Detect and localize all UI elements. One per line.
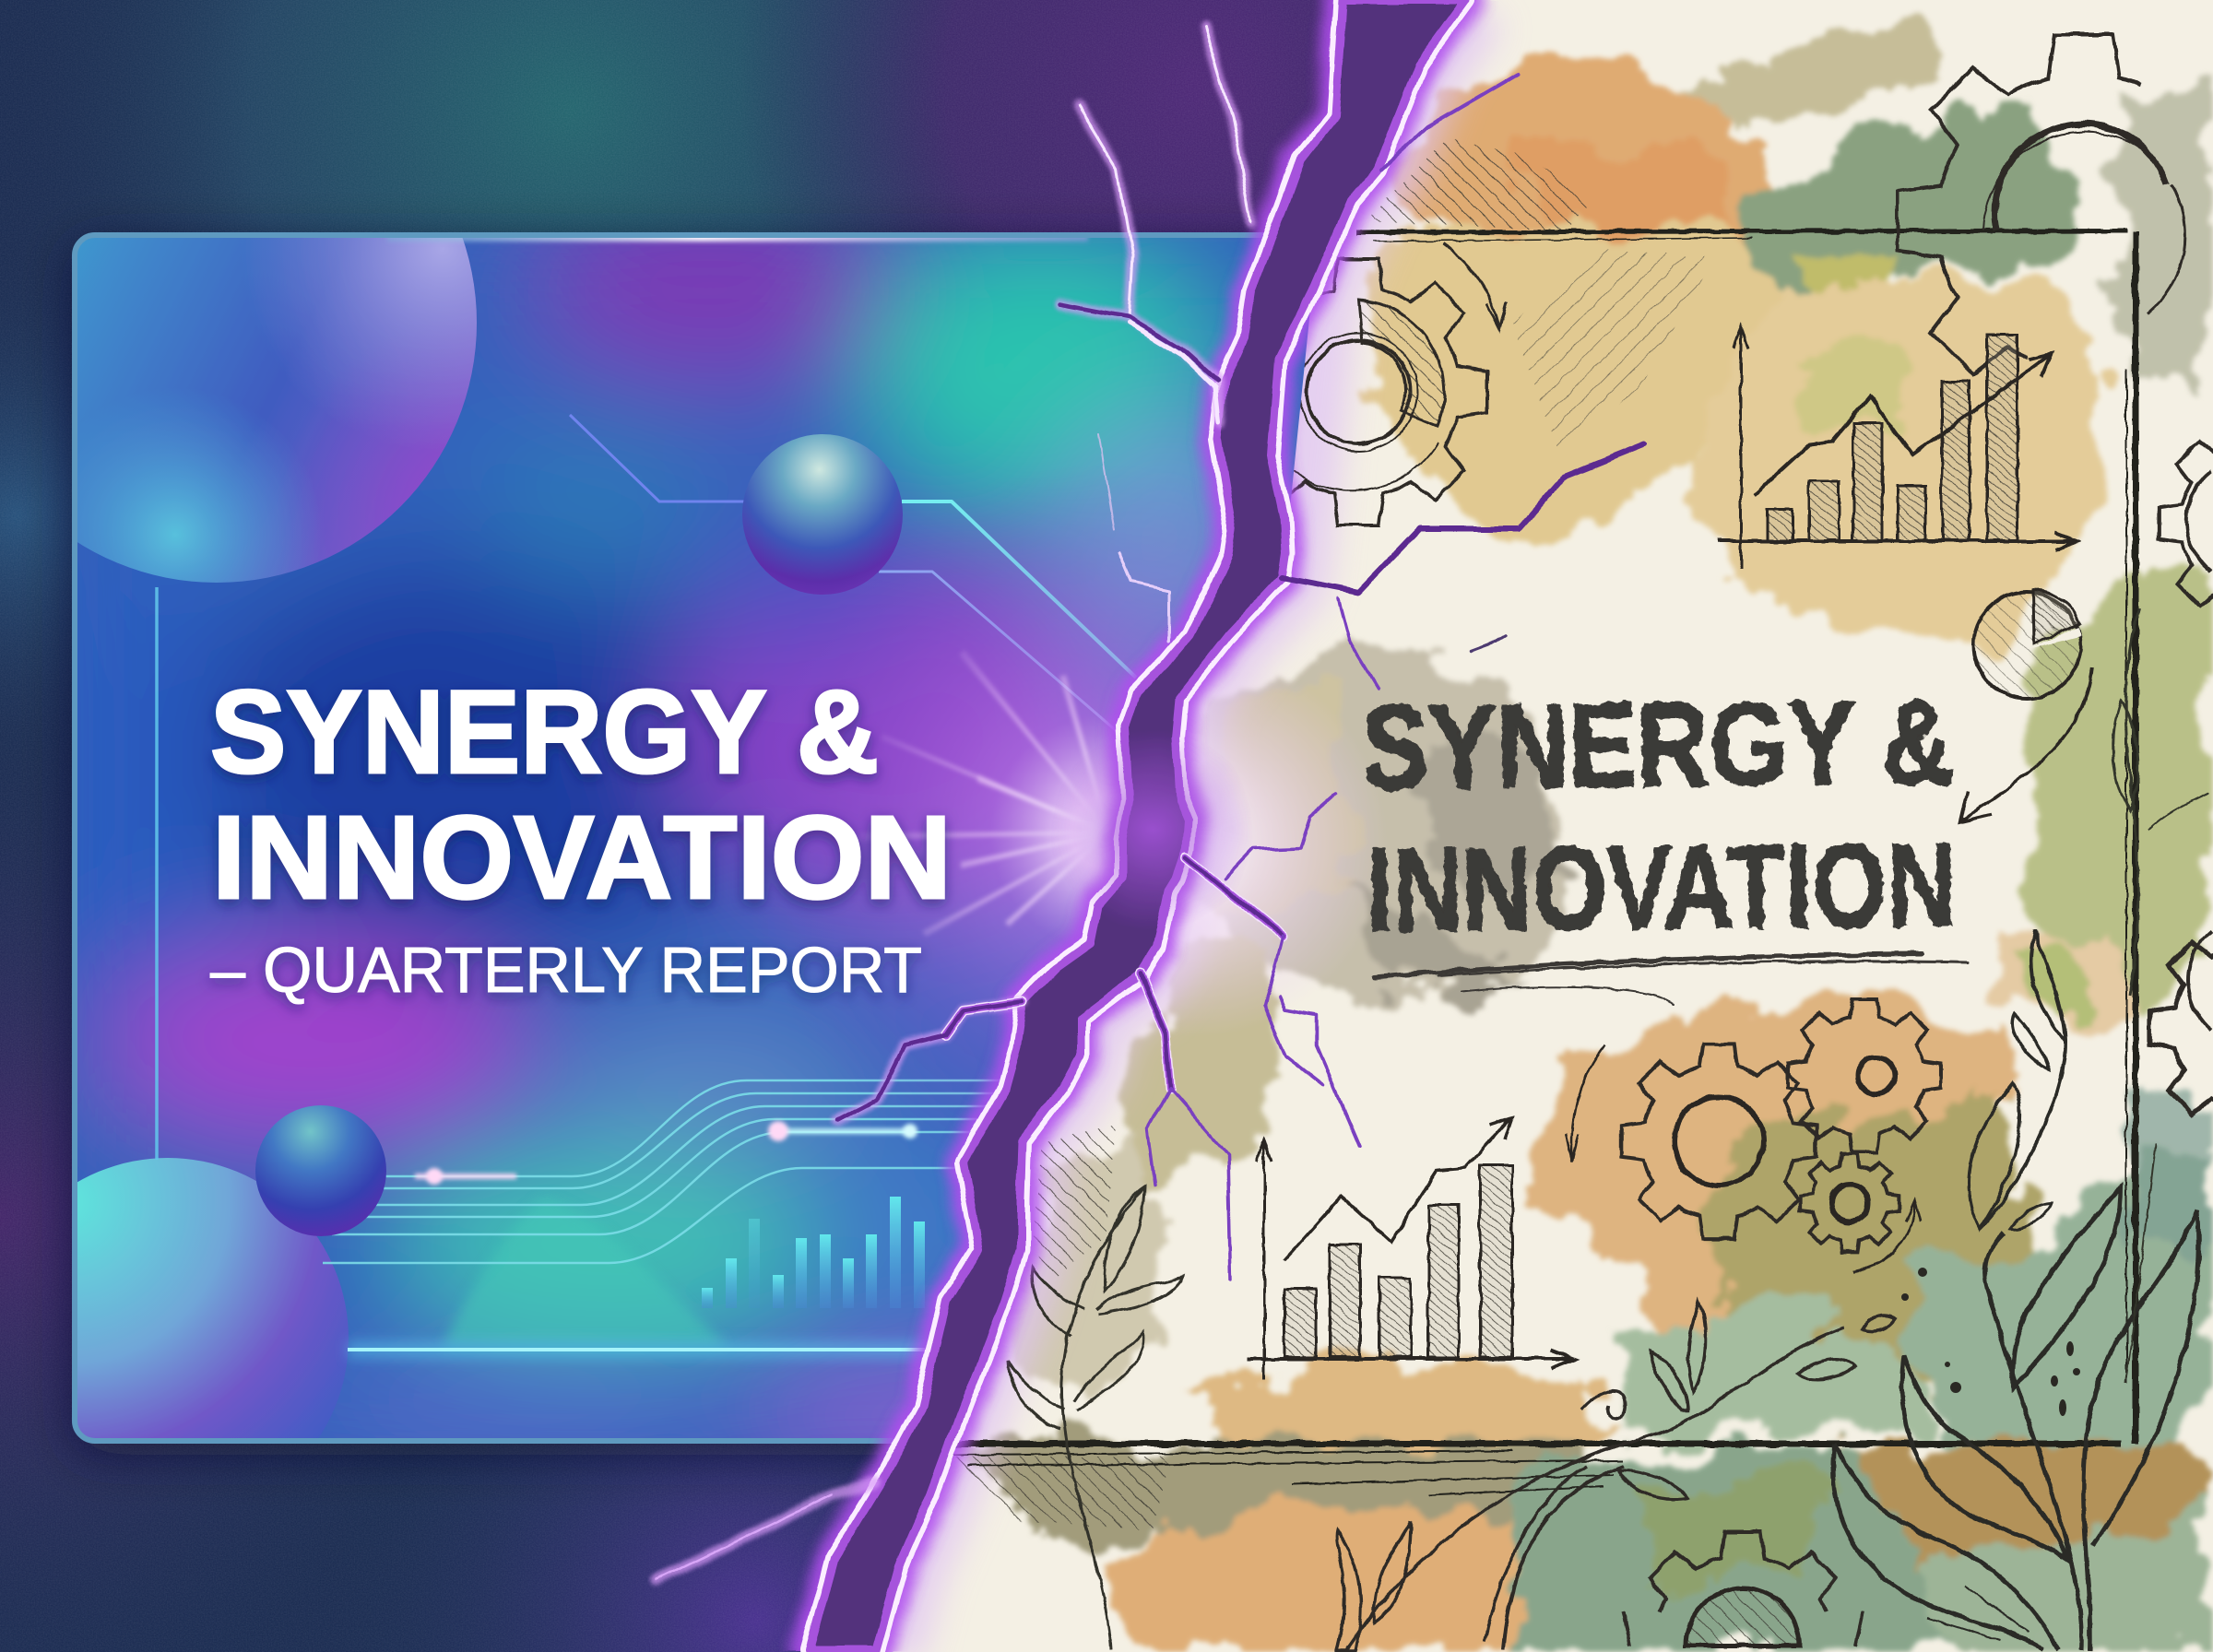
- big sphere: top left: [77, 238, 477, 583]
- plant: bottom center vine: [1336, 1302, 1895, 1650]
- title line: SYNERGY &: SYNERGY &: [210, 667, 879, 798]
- glowing nodes on traces: [415, 1121, 917, 1185]
- teal wave shape: [443, 1198, 728, 1346]
- bar chart: lower sketch: [1248, 1117, 1575, 1380]
- icon: gear top right: [1898, 35, 2185, 393]
- icon: gears at right edge: [2149, 431, 2213, 1125]
- lightning crack: side branches: [657, 27, 1645, 1580]
- watercolor washes: [950, 28, 2213, 1652]
- small sphere: lower: [255, 1105, 386, 1236]
- sketch title line: INNOVATION: INNOVATION: [1366, 819, 1957, 957]
- title underline swoosh: [1375, 954, 1968, 1005]
- glowing bottom line: [348, 1341, 938, 1358]
- ink dots: [1901, 1268, 2080, 1416]
- circuit lines: upper traces: [570, 415, 1136, 744]
- plant: bottom right leaves: [1833, 931, 2198, 1650]
- top edge glow: [387, 229, 1088, 242]
- hand-lettered title: [1361, 674, 1957, 957]
- panel: watercolor paper: [811, 0, 2213, 1652]
- gear: top right: [1788, 999, 1941, 1152]
- bar chart: top right sketch: [1718, 325, 2077, 569]
- icon: gear bottom: [1623, 1532, 1863, 1646]
- plant: right side vine over frame: [2112, 608, 2208, 1383]
- arrow: curved below pie chart: [1960, 667, 2092, 822]
- arrows near gears: [1566, 1044, 1921, 1272]
- lilac glow on torn paper edge: [876, 0, 1465, 1652]
- gear: small: [1801, 1154, 1899, 1252]
- energy burst at crack: [740, 464, 1477, 1201]
- subtitle: quarterly report: – QUARTERLY REPORT: [210, 934, 922, 1006]
- card border: [75, 235, 1366, 1441]
- sketch frame lines: [947, 230, 2136, 1495]
- mini bar chart: [702, 1197, 925, 1308]
- gear: large: [1621, 1044, 1817, 1239]
- circuit line bundle: [323, 1080, 1005, 1263]
- small sphere: upper: [742, 434, 903, 595]
- hatching patches: [941, 138, 1715, 1530]
- title: digital side: [210, 667, 952, 1006]
- lightning crack: main: [810, 0, 1465, 1650]
- gears cluster: [1621, 999, 1941, 1252]
- sketch title line: SYNERGY &: SYNERGY &: [1361, 674, 1955, 815]
- title line: INNOVATION: INNOVATION: [212, 792, 952, 924]
- big sphere: bottom left: [77, 1158, 349, 1438]
- icon: gear top left: [1229, 244, 1507, 525]
- panel: digital gradient card: [50, 218, 1309, 1474]
- icon: pie chart: [1973, 590, 2080, 699]
- card mesh gradient colours: [77, 238, 1300, 1438]
- plant: left vine: [1009, 1186, 1183, 1650]
- circuit line: vertical left: [155, 587, 159, 1160]
